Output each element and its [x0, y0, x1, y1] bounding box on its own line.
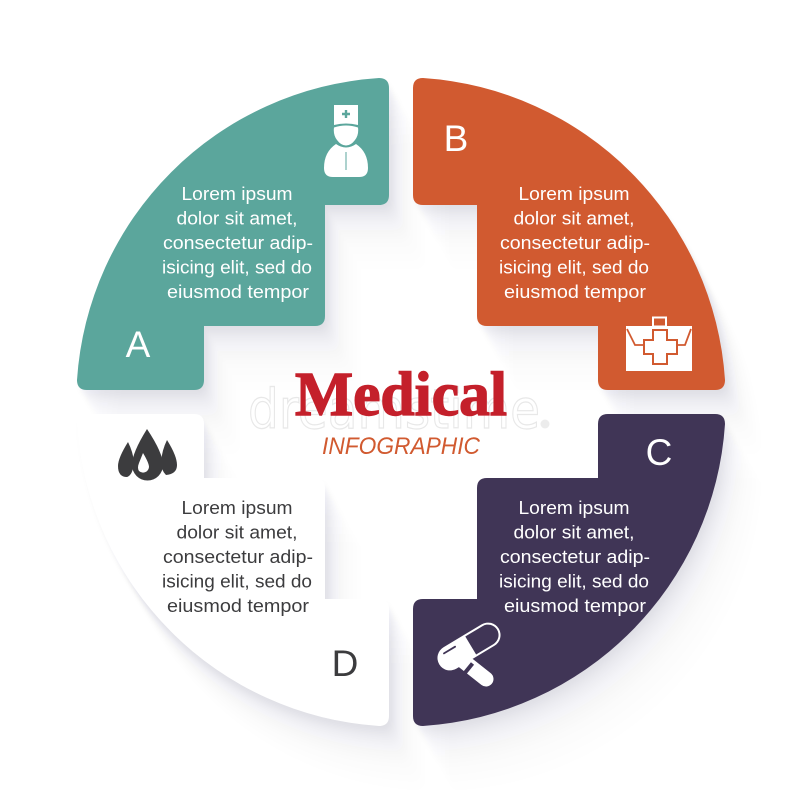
text block B: consectetur adip-	[500, 233, 650, 253]
text block C: consectetur adip-	[500, 547, 650, 567]
panel: A	[77, 78, 389, 390]
text block A: isicing elit, sed do	[162, 258, 312, 278]
letter B: B	[444, 118, 468, 159]
icon: pills	[433, 618, 505, 679]
text block D: eiusmod tempor	[167, 596, 309, 616]
text block A: Lorem ipsum	[182, 184, 292, 204]
text block D: isicing elit, sed do	[162, 572, 312, 592]
text block C: Lorem ipsum	[518, 498, 630, 518]
title	[295, 361, 507, 460]
panel: C	[413, 414, 725, 726]
text block A: consectetur adip-	[163, 233, 313, 253]
text block A: eiusmod tempor	[167, 282, 309, 302]
watermark: dreamstime	[248, 378, 540, 441]
text block D: Lorem ipsum	[182, 498, 292, 518]
text block B: isicing elit, sed do	[499, 258, 649, 278]
letter D: D	[332, 643, 358, 684]
text block A: dolor sit amet,	[176, 208, 298, 228]
subtitle: INFOGRAPHIC	[322, 433, 481, 460]
text block B: eiusmod tempor	[504, 282, 646, 302]
text block B	[499, 184, 650, 302]
text block D: consectetur adip-	[163, 547, 313, 567]
letter C: C	[646, 432, 672, 473]
text block B: Lorem ipsum	[518, 184, 630, 204]
icon: medical bag	[626, 318, 692, 371]
text block A	[162, 184, 313, 302]
title: Medical	[295, 361, 507, 429]
panel: D	[77, 414, 389, 726]
text block C: isicing elit, sed do	[499, 572, 649, 592]
text block D	[162, 498, 313, 616]
text block C: dolor sit amet,	[514, 522, 634, 542]
icon: drops	[118, 429, 177, 480]
text block C: eiusmod tempor	[504, 596, 646, 616]
panel: B	[413, 78, 725, 390]
letter A: A	[126, 324, 151, 365]
long diagonal shadows	[79, 82, 761, 790]
icon: doctor	[324, 105, 368, 177]
text block B: dolor sit amet,	[514, 208, 634, 228]
text block C	[499, 498, 650, 616]
text block D: dolor sit amet,	[176, 522, 298, 542]
